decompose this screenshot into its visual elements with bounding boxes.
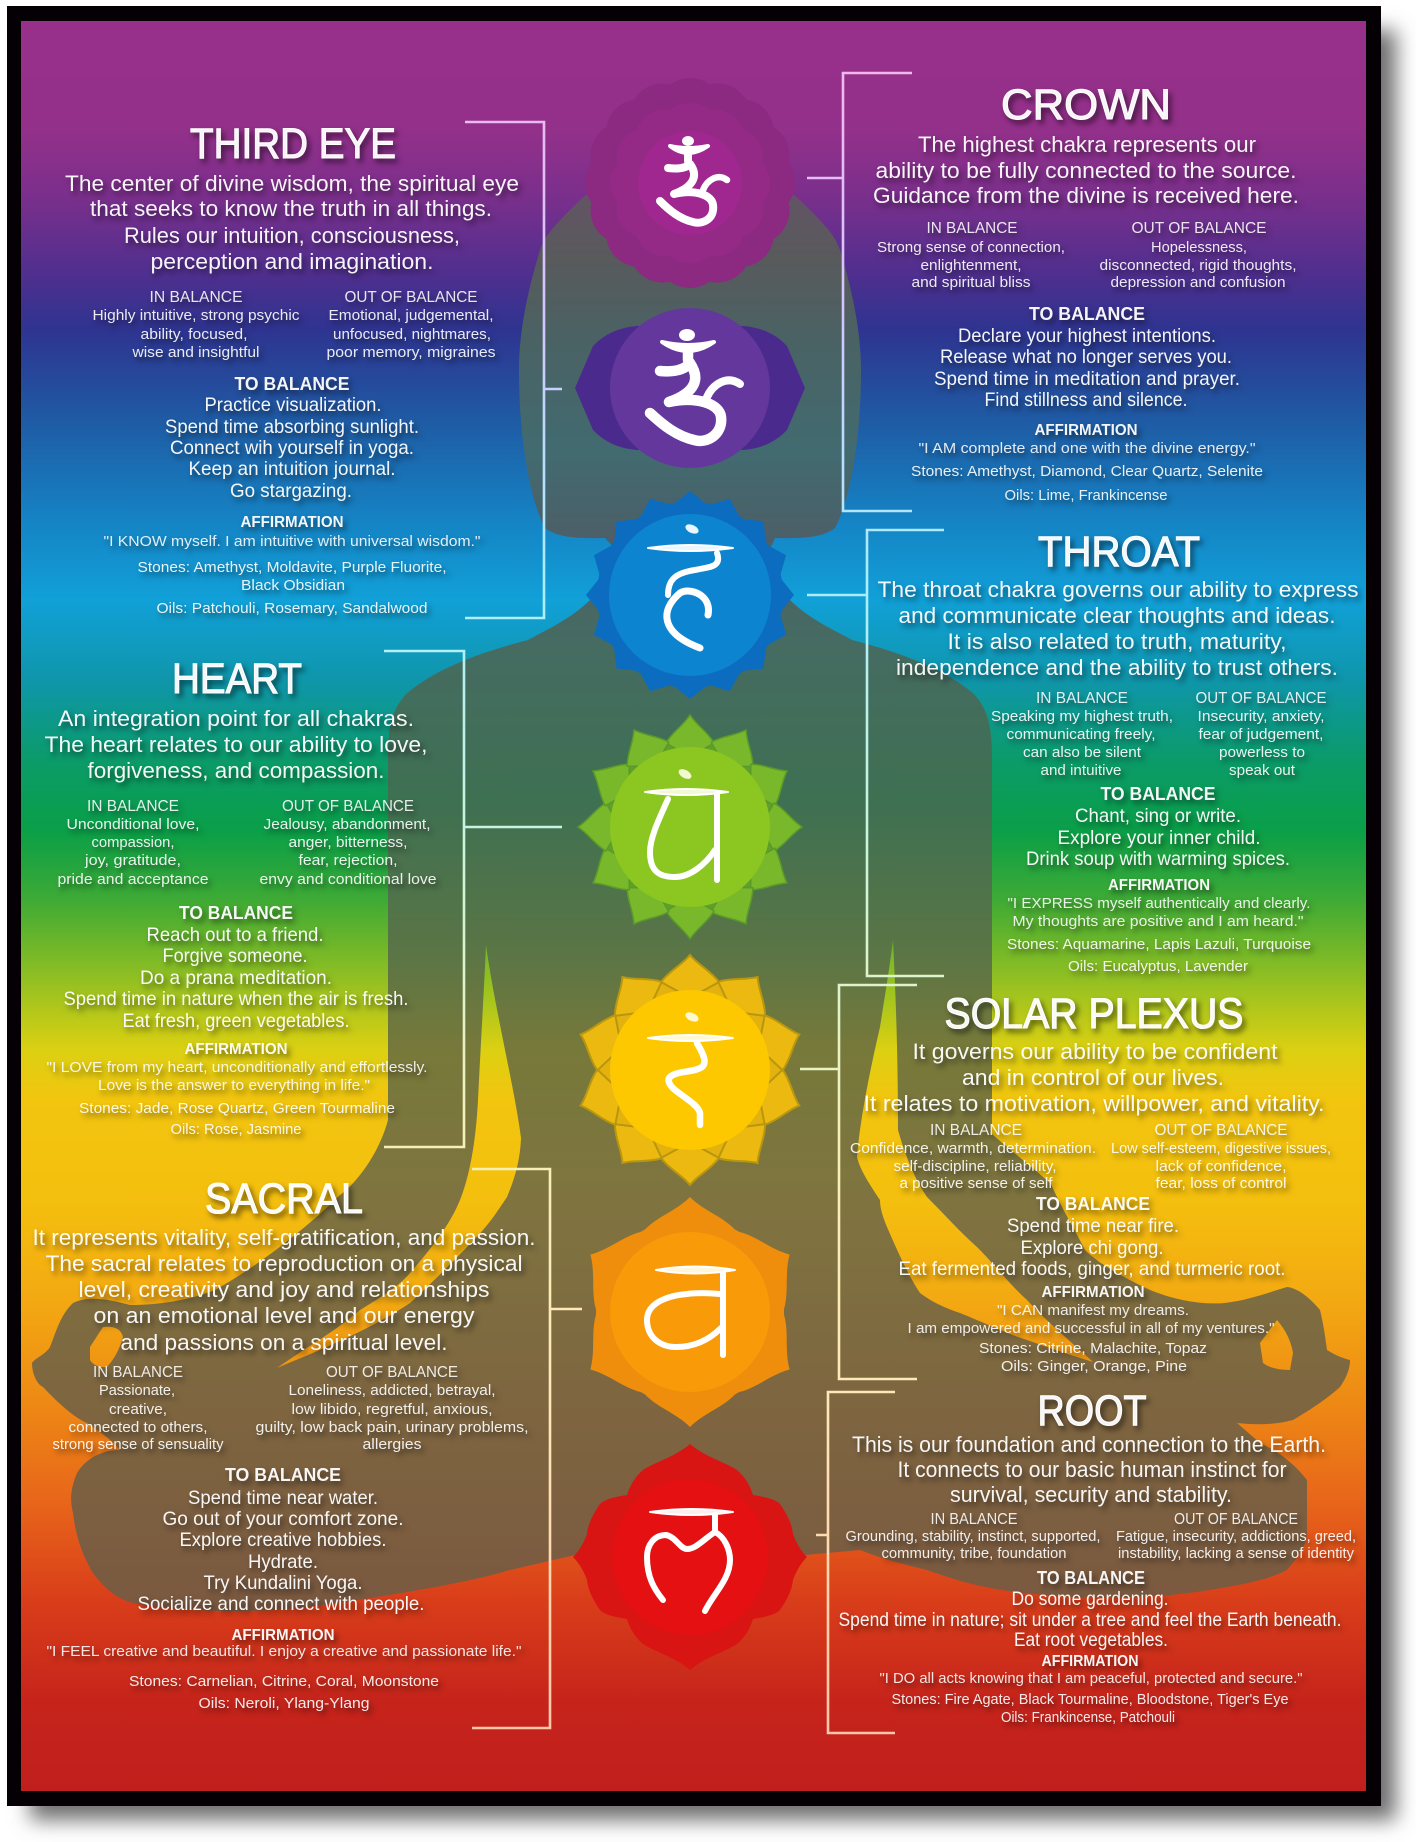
out of balance: anger, bitterness, [288, 834, 408, 851]
affirmation: Stones: Fire Agate, Black Tourmaline, Bloodstone, Tiger's Eye [892, 1691, 1288, 1708]
in balance: communicating freely, [1006, 726, 1156, 743]
chakra: solar plexus [572, 955, 808, 1185]
to balance: TO BALANCE [1100, 784, 1216, 804]
affirmation: My thoughts are positive and I am heard." [1012, 914, 1304, 930]
affirmation: Oils: Frankincense, Patchouli [1001, 1709, 1175, 1726]
to balance: TO BALANCE [225, 1465, 341, 1485]
in balance: IN BALANCE [930, 1511, 1018, 1528]
chakra: crown [583, 76, 797, 290]
description: This is our foundation and connection to the Earth. [852, 1432, 1326, 1457]
to balance: Socialize and connect with people. [138, 1593, 424, 1615]
description: on an emotional level and our energy [94, 1303, 474, 1328]
affirmation: Oils: Rose, Jasmine [170, 1121, 302, 1138]
in balance: joy, gratitude, [84, 852, 181, 869]
bracket: crown [807, 73, 912, 511]
affirmation: "I FEEL creative and beautiful. I enjoy a creative and passionate life." [46, 1644, 522, 1660]
chakra: throat [586, 491, 794, 699]
to balance: Hydrate. [248, 1551, 318, 1573]
description: perception and imagination. [150, 249, 434, 274]
description: It governs our ability to be confident [912, 1039, 1278, 1064]
affirmation: Stones: Amethyst, Diamond, Clear Quartz, Selenite [911, 463, 1263, 480]
out of balance: OUT OF BALANCE [1196, 690, 1326, 707]
affirmation: AFFIRMATION [1042, 1284, 1144, 1301]
to balance: TO BALANCE [1036, 1194, 1150, 1214]
in balance [877, 220, 1065, 291]
meditating body silhouette [32, 150, 1350, 1611]
in balance [58, 798, 208, 888]
affirmation: Stones: Aquamarine, Lapis Lazuli, Turquoise [1007, 936, 1311, 953]
affirmation: Oils: Ginger, Orange, Pine [1001, 1358, 1187, 1375]
in balance [92, 289, 300, 361]
in balance: strong sense of sensuality [52, 1436, 224, 1453]
in balance: Passionate, [99, 1382, 175, 1399]
in balance: Speaking my highest truth, [991, 708, 1173, 725]
out of balance: envy and conditional love [260, 871, 436, 888]
out of balance: OUT OF BALANCE [344, 289, 478, 306]
affirmation: Oils: Eucalyptus, Lavender [1068, 958, 1248, 975]
in balance: self-discipline, reliability, [894, 1158, 1056, 1175]
bracket: third eye [465, 122, 562, 618]
to balance: Declare your highest intentions. [958, 325, 1216, 347]
to balance: Drink soup with warming spices. [1026, 848, 1290, 870]
heading: crown: CROWN [1001, 81, 1171, 129]
to balance: Eat root vegetables. [1014, 1629, 1168, 1651]
affirmation [1007, 877, 1311, 975]
to balance: Do some gardening. [1012, 1588, 1168, 1610]
to balance: Explore your inner child. [1058, 827, 1260, 849]
heading: solar plexus: SOLAR PLEXUS [944, 990, 1244, 1038]
out of balance: Insecurity, anxiety, [1198, 708, 1324, 725]
to balance: Chant, sing or write. [1075, 805, 1241, 827]
to balance: Go out of your comfort zone. [162, 1508, 404, 1530]
chakra: root [573, 1444, 807, 1670]
out of balance: powerless to [1219, 744, 1305, 761]
out of balance: disconnected, rigid thoughts, [1100, 257, 1296, 274]
bracket: sacral [472, 1169, 582, 1728]
description: The heart relates to our ability to love, [44, 732, 427, 757]
in balance [52, 1364, 224, 1453]
bracket: throat [807, 530, 944, 976]
description: The sacral relates to reproduction on a physical [46, 1251, 522, 1276]
description: It is also related to truth, maturity, [948, 629, 1286, 654]
out of balance: unfocused, nightmares, [333, 326, 491, 343]
out of balance: Emotional, judgemental, [328, 307, 494, 324]
affirmation: AFFIRMATION [184, 1041, 288, 1058]
affirmation [911, 422, 1263, 504]
in balance: IN BALANCE [930, 1122, 1022, 1139]
affirmation: "I CAN manifest my dreams. [997, 1303, 1189, 1319]
in balance: Strong sense of connection, [877, 239, 1065, 256]
chakra: third eye [575, 308, 805, 468]
in balance: compassion, [92, 834, 174, 851]
out of balance [1100, 220, 1296, 291]
affirmation [104, 514, 480, 617]
out of balance: guilty, low back pain, urinary problems, [256, 1419, 528, 1436]
in balance: Highly intuitive, strong psychic [92, 307, 300, 324]
panel: sacral [32, 1175, 536, 1712]
in balance: IN BALANCE [87, 798, 179, 815]
in balance [846, 1511, 1100, 1562]
to balance: Spend time in nature when the air is fresh. [64, 988, 408, 1010]
panel: crown [873, 81, 1299, 504]
affirmation: AFFIRMATION [1034, 422, 1138, 439]
out of balance [326, 289, 496, 361]
description: forgiveness, and compassion. [88, 758, 385, 783]
to balance: TO BALANCE [179, 903, 293, 923]
out of balance: speak out [1229, 762, 1296, 779]
panel: solar plexus [850, 990, 1331, 1375]
bracket: solar plexus [800, 985, 917, 1379]
to balance: Explore chi gong. [1020, 1237, 1164, 1259]
to balance: Explore creative hobbies. [180, 1529, 386, 1551]
out of balance: fear of judgement, [1198, 726, 1324, 743]
panel: root [838, 1387, 1356, 1726]
in balance: creative, [109, 1401, 167, 1418]
affirmation: Stones: Carnelian, Citrine, Coral, Moonstone [129, 1673, 439, 1690]
description: The center of divine wisdom, the spiritual eye [65, 171, 519, 196]
symbol: solar ram [648, 1010, 733, 1125]
in balance: a positive sense of self [900, 1175, 1053, 1192]
to balance: Eat fresh, green vegetables. [122, 1010, 350, 1032]
in balance: Confidence, warmth, determination. [850, 1140, 1096, 1157]
in balance: IN BALANCE [93, 1364, 183, 1381]
in balance: connected to others, [68, 1419, 208, 1436]
in balance: can also be silent [1023, 744, 1142, 761]
in balance [850, 1122, 1096, 1192]
out of balance: Hopelessness, [1151, 239, 1247, 256]
to balance [838, 1568, 1342, 1651]
description [864, 1039, 1324, 1116]
out of balance [260, 798, 436, 888]
panel: heart [44, 655, 436, 1138]
in balance: enlightenment, [920, 257, 1022, 274]
description: It relates to motivation, willpower, and vitality. [864, 1091, 1324, 1116]
out of balance: poor memory, migraines [326, 344, 496, 361]
to balance: Forgive someone. [162, 945, 308, 967]
description [873, 132, 1299, 208]
to balance: Reach out to a friend. [146, 924, 324, 946]
in balance: Grounding, stability, instinct, supported, [846, 1528, 1100, 1545]
description: An integration point for all chakras. [58, 706, 414, 731]
affirmation: Stones: Amethyst, Moldavite, Purple Fluorite, [138, 559, 446, 576]
to balance: Try Kundalini Yoga. [204, 1572, 362, 1594]
symbol: heart yam [645, 767, 728, 880]
to balance [165, 374, 419, 502]
heading: heart: HEART [172, 655, 302, 703]
to balance: Spend time absorbing sunlight. [165, 416, 419, 438]
in balance: ability, focused, [140, 326, 248, 343]
out of balance: Jealousy, abandonment, [264, 816, 430, 833]
to balance: Spend time in meditation and prayer. [934, 368, 1240, 390]
description [44, 706, 427, 783]
affirmation: Oils: Lime, Frankincense [1004, 487, 1168, 504]
in balance: and intuitive [1040, 762, 1122, 779]
description: that seeks to know the truth in all things. [90, 196, 492, 221]
heading: root: ROOT [1038, 1387, 1146, 1435]
in balance: and spiritual bliss [912, 274, 1030, 291]
heading: sacral: SACRAL [205, 1175, 363, 1223]
affirmation [908, 1284, 1274, 1375]
affirmation: "I AM complete and one with the divine energy." [918, 441, 1256, 457]
bracket: heart [384, 651, 562, 1147]
affirmation: AFFIRMATION [240, 514, 344, 531]
in balance [991, 690, 1173, 779]
affirmation: "I DO all acts knowing that I am peaceful, protected and secure." [880, 1671, 1302, 1687]
symbol: root lam [647, 1509, 733, 1611]
description: and communicate clear thoughts and ideas. [898, 603, 1336, 628]
to balance [64, 903, 408, 1032]
to balance: Connect wih yourself in yoga. [170, 437, 414, 459]
panel: third eye [65, 120, 519, 617]
out of balance [256, 1364, 528, 1453]
description [878, 577, 1358, 680]
affirmation: Love is the answer to everything in life." [98, 1078, 370, 1094]
to balance: Find stillness and silence. [984, 389, 1188, 411]
symbol: third eye om [650, 329, 740, 441]
to balance [138, 1465, 424, 1615]
description: ability to be fully connected to the source. [876, 158, 1296, 183]
in balance: wise and insightful [131, 344, 260, 361]
chakra: sacral [567, 1197, 813, 1427]
to balance [898, 1194, 1286, 1280]
in balance: IN BALANCE [926, 220, 1018, 237]
to balance: TO BALANCE [1029, 304, 1145, 324]
in balance: pride and acceptance [58, 871, 208, 888]
description [32, 1225, 536, 1355]
out of balance: OUT OF BALANCE [282, 798, 414, 815]
description: independence and the ability to trust others. [896, 655, 1338, 680]
to balance: Spend time near water. [188, 1487, 378, 1509]
symbol: sacral vam [647, 1266, 735, 1355]
out of balance: Low self-esteem, digestive issues, [1111, 1140, 1331, 1157]
description: Rules our intuition, consciousness, [124, 223, 460, 248]
description: It connects to our basic human instinct for [898, 1457, 1286, 1482]
to balance: Spend time in nature; sit under a tree and feel the Earth beneath. [838, 1609, 1342, 1631]
out of balance: instability, lacking a sense of identity [1118, 1545, 1354, 1562]
out of balance [1116, 1511, 1356, 1562]
to balance: TO BALANCE [1037, 1568, 1145, 1588]
out of balance: lack of confidence, [1156, 1158, 1286, 1175]
to balance: Go stargazing. [230, 480, 352, 502]
affirmation [880, 1653, 1302, 1726]
out of balance: fear, loss of control [1156, 1175, 1286, 1192]
affirmation: AFFIRMATION [232, 1627, 334, 1644]
out of balance: low libido, regretful, anxious, [292, 1401, 492, 1418]
affirmation: Stones: Jade, Rose Quartz, Green Tourmaline [79, 1100, 395, 1117]
out of balance: allergies [362, 1436, 422, 1453]
to balance: Keep an intuition journal. [188, 458, 396, 480]
to balance [1026, 784, 1290, 870]
out of balance: OUT OF BALANCE [1154, 1122, 1288, 1139]
in balance: Unconditional love, [66, 816, 200, 833]
to balance: TO BALANCE [234, 374, 350, 394]
description [852, 1432, 1326, 1507]
affirmation: AFFIRMATION [1108, 877, 1210, 894]
heading: throat: THROAT [1038, 528, 1200, 576]
in balance: IN BALANCE [1036, 690, 1128, 707]
out of balance: OUT OF BALANCE [326, 1364, 458, 1381]
affirmation: Oils: Neroli, Ylang-Ylang [198, 1695, 370, 1712]
symbol: crown om [660, 136, 727, 223]
chakra: heart [578, 715, 802, 939]
out of balance: Loneliness, addicted, betrayal, [288, 1382, 496, 1399]
out of balance: fear, rejection, [298, 852, 398, 869]
out of balance: OUT OF BALANCE [1132, 220, 1266, 237]
description: level, creativity and joy and relationships [78, 1277, 489, 1302]
out of balance [1196, 690, 1326, 779]
to balance: Practice visualization. [204, 394, 382, 416]
description: survival, security and stability. [950, 1482, 1232, 1507]
heading: third eye: THIRD EYE [190, 120, 396, 168]
out of balance: OUT OF BALANCE [1174, 1511, 1298, 1528]
to balance: Spend time near fire. [1007, 1215, 1179, 1237]
symbol: throat ham [648, 522, 733, 648]
description: The throat chakra governs our ability to express [878, 577, 1358, 602]
description: It represents vitality, self-gratification, and passion. [32, 1225, 536, 1250]
bracket: root [816, 1392, 895, 1733]
description [65, 171, 519, 274]
affirmation: "I KNOW myself. I am intuitive with universal wisdom." [104, 534, 480, 550]
affirmation: AFFIRMATION [1042, 1653, 1138, 1670]
description: The highest chakra represents our [918, 132, 1256, 157]
to balance [934, 304, 1240, 411]
affirmation [46, 1041, 428, 1138]
to balance: Release what no longer serves you. [940, 346, 1232, 368]
affirmation: I am empowered and successful in all of my ventures." [908, 1321, 1274, 1337]
affirmation: "I EXPRESS myself authentically and clearly. [1008, 896, 1310, 912]
out of balance: depression and confusion [1110, 274, 1286, 291]
affirmation: Black Obsidian [241, 577, 345, 594]
out of balance: Fatigue, insecurity, addictions, greed, [1116, 1528, 1356, 1545]
panel: throat [878, 528, 1358, 975]
in balance: community, tribe, foundation [882, 1545, 1066, 1562]
description: Guidance from the divine is received here. [873, 183, 1299, 208]
description: and in control of our lives. [962, 1065, 1224, 1090]
in balance: IN BALANCE [150, 289, 242, 306]
to balance: Eat fermented foods, ginger, and turmeric root. [898, 1258, 1286, 1280]
description: and passions on a spiritual level. [120, 1330, 448, 1355]
to balance: Do a prana meditation. [140, 967, 332, 989]
affirmation: "I LOVE from my heart, unconditionally and effortlessly. [46, 1060, 428, 1076]
out of balance [1111, 1122, 1331, 1192]
affirmation: Oils: Patchouli, Rosemary, Sandalwood [156, 600, 428, 617]
affirmation [46, 1627, 522, 1712]
affirmation: Stones: Citrine, Malachite, Topaz [979, 1340, 1207, 1357]
